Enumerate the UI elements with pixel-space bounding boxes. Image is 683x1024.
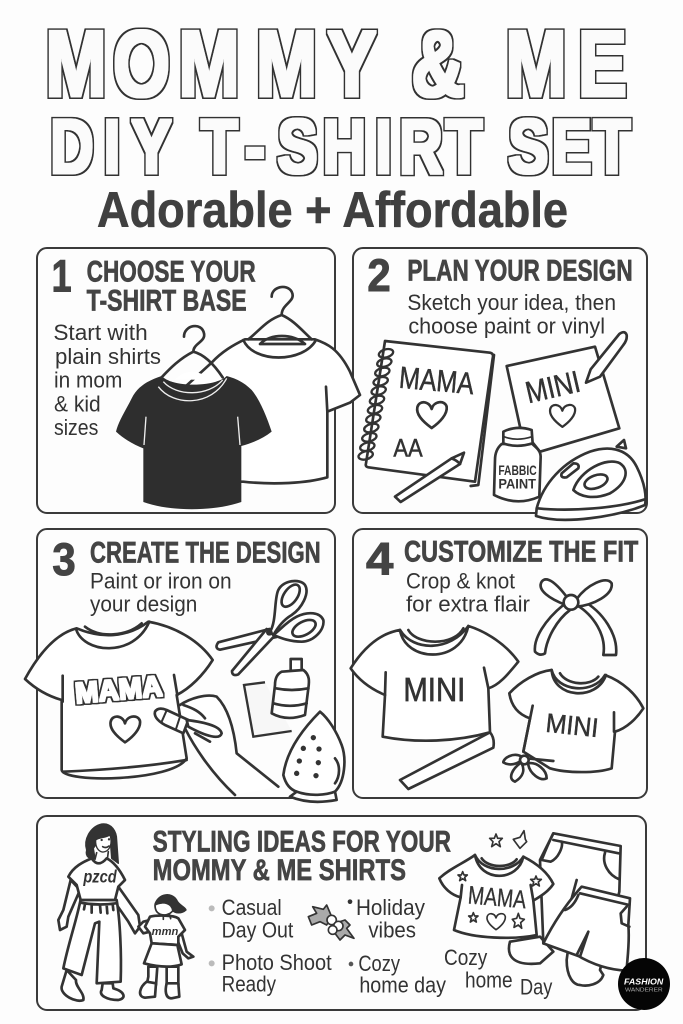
step 3 description: your design xyxy=(90,592,197,617)
panel: step 4 customize the fit xyxy=(351,529,647,798)
step 1 description: plain shirts xyxy=(55,344,161,369)
icon: iron xyxy=(536,440,646,520)
bullet: holiday vibes: vibes xyxy=(368,918,416,943)
illustration: star MAMA shirt xyxy=(439,831,553,938)
illustration: mother xyxy=(58,824,140,1001)
illustration: pants xyxy=(509,833,630,986)
illustration: child: mmn xyxy=(152,926,179,938)
step 1 heading xyxy=(87,256,256,318)
bullet: cozy home day: home day xyxy=(359,972,446,997)
bullet: photo shoot ready xyxy=(209,950,332,997)
icon: holly sprig xyxy=(308,905,354,940)
step 1 description: & kid xyxy=(54,392,101,417)
bullet: cozy home day xyxy=(349,951,446,997)
title line 1: MOMMY & ME xyxy=(45,11,627,116)
icon: fabric paint bottle: FABBIC xyxy=(498,462,537,478)
logo: fashion wanderer xyxy=(618,958,670,1010)
step 3 heading: CREATE THE DESIGN xyxy=(90,536,321,569)
panel: step 2 plan your design xyxy=(353,248,647,520)
icon: white t-shirt on hanger xyxy=(163,287,360,483)
step 3 description: Paint or iron on xyxy=(90,568,232,593)
icon: paper with MINI sketch and pen xyxy=(507,332,627,452)
illustration: cropped MINI shirt: MINI xyxy=(403,672,465,709)
step 1 number: 1 xyxy=(52,251,72,302)
step 1 description: in mom xyxy=(54,367,122,392)
icon: hand painting with marker xyxy=(155,696,278,795)
panel: step 3 create the design xyxy=(25,529,344,802)
logo: fashion wanderer: WANDERER xyxy=(625,987,663,993)
illustration: child xyxy=(138,895,193,998)
label: cozy home day handwritten xyxy=(444,945,552,999)
illustration: MAMA t-shirt: MAMA xyxy=(74,670,164,710)
icon: paint bottle xyxy=(272,659,309,718)
illustration: cropped MINI shirt xyxy=(351,626,518,789)
bullet: casual day out: Casual xyxy=(222,895,282,920)
bullet: holiday vibes: Holiday xyxy=(356,895,425,920)
label: cozy home day handwritten: Day xyxy=(520,974,552,999)
step 1 heading: CHOOSE YOUR xyxy=(87,256,256,289)
icon: fabric paint bottle: PAINT xyxy=(498,475,536,491)
label: cozy home day handwritten: Cozy xyxy=(444,945,487,970)
step 4 number: 4 xyxy=(366,533,393,584)
icon: iron with steam holes xyxy=(283,712,344,802)
bullet: casual day out: Day Out xyxy=(222,918,293,943)
step 4 description: for extra flair xyxy=(406,592,530,617)
styling heading: STYLING IDEAS FOR YOUR xyxy=(153,826,451,859)
title line 2: DIY T-SHIRT SET xyxy=(50,103,630,190)
step 2 description xyxy=(407,290,616,338)
icon: knotted headband xyxy=(535,579,616,655)
icon: vinyl sheet xyxy=(244,682,292,737)
step 1 heading: T-SHIRT BASE xyxy=(87,285,247,318)
label: cozy home day handwritten: home xyxy=(465,968,513,993)
icon: spiral notebook: AA xyxy=(393,435,423,463)
bullet: holiday vibes xyxy=(348,895,425,943)
icon: spiral notebook: MAMA xyxy=(398,361,476,401)
icon: paper with MINI sketch and pen: MINI xyxy=(522,365,583,410)
subtitle: Adorable + Affordable xyxy=(97,182,568,238)
illustration: knotted MINI shirt xyxy=(503,670,643,782)
styling heading: MOMMY & ME SHIRTS xyxy=(153,854,406,887)
logo: fashion wanderer: FASHION xyxy=(624,976,664,986)
bullet: casual day out xyxy=(209,895,293,943)
illustration: MAMA t-shirt xyxy=(25,622,213,778)
step 1 description: Start with xyxy=(53,320,148,345)
step 3 number: 3 xyxy=(52,534,76,585)
step 2 number: 2 xyxy=(367,250,391,301)
step 1 description: sizes xyxy=(54,415,98,440)
bullet: photo shoot ready: Ready xyxy=(222,972,276,997)
icon: spiral notebook xyxy=(358,341,494,502)
step 4 description xyxy=(406,568,530,617)
icon: fabric paint bottle xyxy=(494,428,541,501)
icon: scissors xyxy=(217,581,323,675)
step 4 description: Crop & knot xyxy=(406,568,515,593)
illustration: knotted MINI shirt: MINI xyxy=(544,708,600,743)
bullet: photo shoot ready: Photo Shoot xyxy=(222,950,332,975)
panel: styling ideas xyxy=(37,816,670,1010)
bullet: cozy home day: Cozy xyxy=(358,951,400,976)
styling heading xyxy=(153,826,451,887)
step 3 description xyxy=(90,568,232,617)
illustration: star MAMA shirt: MAMA xyxy=(467,881,527,914)
panel: step 1 choose your t-shirt base xyxy=(37,248,360,513)
step 2 description: Sketch your idea, then xyxy=(407,290,616,315)
step 2 description: choose paint or vinyl xyxy=(408,313,605,338)
title xyxy=(45,11,630,190)
icon: black t-shirt on hanger xyxy=(116,326,272,509)
step 1 description xyxy=(53,320,161,440)
illustration: mother: pzcd xyxy=(83,866,117,886)
